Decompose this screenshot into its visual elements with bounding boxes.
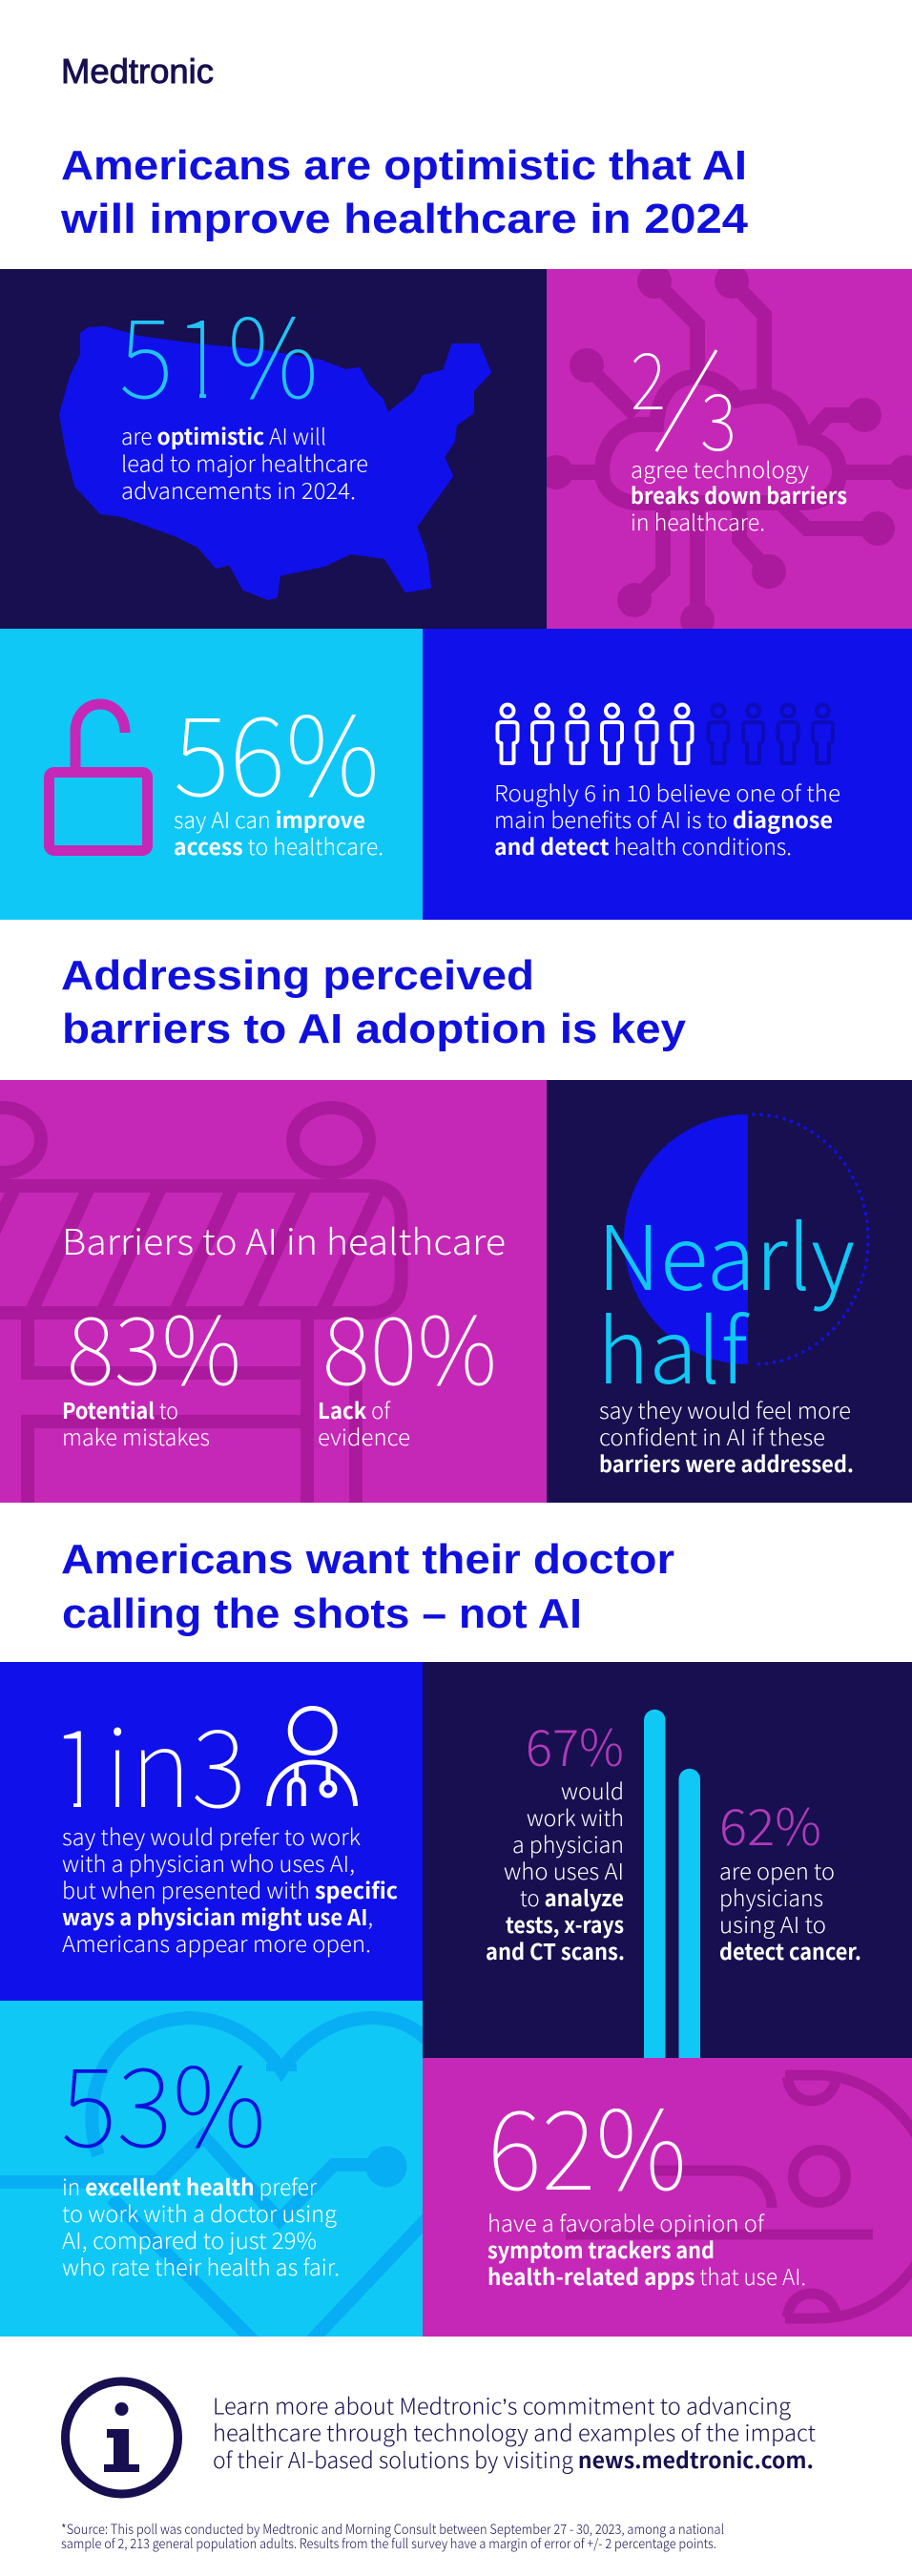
text: prefer physician: ways a physician might use AI, bbox=[62, 1900, 373, 1932]
stat: nearly half: half bbox=[597, 1280, 750, 1409]
text: improve access: access to healthcare. bbox=[174, 829, 383, 862]
text: learn more: healthcare through technology and examples of the impact bbox=[213, 2416, 816, 2448]
stat: 2/3 bbox=[631, 319, 736, 473]
title: will improve healthcare in 2024 bbox=[60, 196, 749, 242]
text: analyze tests: work with bbox=[527, 1800, 624, 1833]
panel: nearly half bbox=[547, 1080, 912, 1503]
text: improve access bbox=[174, 802, 383, 862]
heading: barriers: barriers to AI adoption is key bbox=[62, 1006, 687, 1052]
text: diagnose and detect: Roughly 6 in 10 believe one of the bbox=[494, 776, 840, 808]
text: potential: Potential to bbox=[62, 1393, 178, 1425]
text: prefer physician bbox=[62, 1819, 398, 1959]
text: analyze tests: who uses AI bbox=[504, 1854, 624, 1886]
text: diagnose and detect bbox=[494, 776, 840, 862]
text: symptom trackers: health-related apps that use AI. bbox=[487, 2259, 806, 2292]
text: diagnose and detect: and detect health conditions. bbox=[494, 829, 792, 862]
stat: 62% favorable: 62% bbox=[487, 2064, 687, 2222]
text: breaks down barriers: breaks down barriers bbox=[631, 478, 847, 510]
text: analyze tests: and CT scans. bbox=[486, 1934, 625, 1966]
text: detect cancer: are open to bbox=[719, 1854, 835, 1886]
stat: nearly half: Nearly bbox=[597, 1187, 855, 1316]
chart: two bars bbox=[644, 1710, 700, 2058]
panel: 6 in 10 bbox=[423, 629, 912, 920]
stat: 1in3: 1in3 bbox=[50, 1682, 246, 1839]
source note: sample of 2, 213 general population adults. Results from the full survey have a margin of error of +/- 2 percentage points. bbox=[61, 2534, 716, 2553]
text: analyze tests bbox=[486, 1774, 625, 1966]
text: learn more: Learn more about Medtronic ’s commitment to advancing bbox=[213, 2389, 791, 2421]
text: symptom trackers: symptom trackers and bbox=[487, 2233, 715, 2265]
stat: 62% open: 62% bbox=[719, 1788, 821, 1860]
text: optimistic: lead to major healthcare bbox=[121, 447, 368, 479]
panel: 67% and 62% bbox=[423, 1662, 912, 2058]
stat: 67%: 67% bbox=[526, 1709, 624, 1781]
text: optimistic: advancements in 2024. bbox=[121, 473, 356, 506]
text: learn more: of their AI-based solutions by visiting news.medtronic.com. bbox=[213, 2442, 814, 2475]
text: prefer physician: Americans appear more open. bbox=[62, 1926, 371, 1959]
text: breaks down barriers bbox=[631, 452, 847, 537]
text: improve access: say AI can improve bbox=[174, 802, 365, 835]
source note: *Source: This poll was conducted by Medtronic and Morning Consult between September 27 - 30, 2023, among a national bbox=[61, 2520, 724, 2539]
panel: 51% optimistic bbox=[0, 269, 547, 629]
source note bbox=[61, 2520, 724, 2553]
text: analyze tests: a physician bbox=[512, 1827, 624, 1859]
text: detect cancer: detect cancer. bbox=[719, 1934, 861, 1966]
icon: heart with pulse bbox=[0, 2018, 429, 2342]
text: more confident bbox=[599, 1393, 854, 1479]
icon: stethoscope bbox=[566, 2075, 912, 2318]
stat: 83%: 83% bbox=[67, 1277, 241, 1412]
text: lack of evidence: Lack of bbox=[318, 1393, 391, 1425]
text: potential: make mistakes bbox=[62, 1420, 210, 1452]
text: diagnose and detect: main benefits of AI is to diagnose bbox=[494, 802, 833, 835]
text: excellent health: in excellent health prefer bbox=[62, 2170, 318, 2202]
text: detect cancer: using AI to bbox=[719, 1907, 826, 1940]
Medtronic logo: Medtronic bbox=[61, 52, 214, 91]
text: excellent health: AI, compared to just 29% bbox=[62, 2223, 317, 2255]
panel: 1 in 3 bbox=[0, 1662, 423, 2001]
heading: barriers bbox=[61, 952, 687, 1052]
icon: cloud circuit bbox=[539, 264, 912, 637]
panel: 53% excellent health bbox=[0, 2001, 429, 2342]
text: analyze tests: tests, x-rays bbox=[506, 1907, 624, 1940]
heading: doctors: Americans want their doctor bbox=[61, 1536, 674, 1583]
panel: 2/3 technology bbox=[539, 264, 912, 637]
text: more confident: confident in AI if these bbox=[599, 1420, 825, 1452]
panel: 62% symptom trackers bbox=[423, 2058, 912, 2337]
text: learn more bbox=[213, 2389, 816, 2475]
text: prefer physician: with a physician who uses AI, bbox=[62, 1846, 355, 1879]
text: symptom trackers bbox=[487, 2206, 806, 2292]
text: optimistic: are optimistic AI will bbox=[121, 419, 326, 451]
text: excellent health: to work with a doctor using bbox=[62, 2196, 337, 2229]
heading: doctors: calling the shots – not AI bbox=[62, 1590, 582, 1637]
text: lack of evidence bbox=[318, 1393, 410, 1452]
stat: 53%: 53% bbox=[61, 2021, 266, 2179]
panel: 56% access bbox=[0, 629, 423, 920]
stat: 56%: 56% bbox=[174, 670, 380, 828]
text: lack of evidence: evidence bbox=[318, 1420, 410, 1452]
chart: half filled circle bbox=[624, 1114, 868, 1364]
text: more confident: barriers were addressed. bbox=[599, 1446, 854, 1479]
text: breaks down barriers: agree technology bbox=[631, 452, 809, 485]
title bbox=[60, 142, 749, 242]
text: excellent health: who rate their health as fair. bbox=[62, 2250, 340, 2282]
stat: 2/3: 3 bbox=[700, 360, 736, 473]
text: breaks down barriers: in healthcare. bbox=[631, 505, 765, 537]
stat: nearly half bbox=[597, 1187, 855, 1409]
text: excellent health bbox=[62, 2170, 340, 2282]
text: analyze tests: would bbox=[561, 1774, 624, 1806]
icon: road barrier bbox=[0, 1108, 401, 1517]
text: prefer physician: say they would prefer to work bbox=[62, 1819, 361, 1852]
text: prefer physician: but when presented with specific bbox=[62, 1873, 398, 1905]
stat: 51%: 51% bbox=[119, 272, 319, 430]
text: detect cancer bbox=[719, 1854, 861, 1966]
icon: information bbox=[65, 2381, 177, 2494]
heading: barriers: Addressing perceived bbox=[61, 952, 534, 999]
text: potential bbox=[62, 1393, 210, 1452]
icon: open padlock bbox=[50, 704, 147, 851]
panel: barriers to AI bbox=[0, 1080, 547, 1517]
icon: US map bbox=[61, 328, 489, 598]
stat: 2/3: 2 bbox=[631, 319, 666, 432]
icon: ten people, six highlighted bbox=[498, 704, 833, 763]
title: Americans are optimistic that AI bbox=[61, 142, 747, 189]
text: detect cancer: physicians bbox=[719, 1880, 823, 1913]
heading: doctors bbox=[61, 1536, 674, 1637]
icon: doctor bbox=[269, 1708, 356, 1806]
subheading: Barriers to AI in healthcare bbox=[62, 1214, 506, 1265]
text: more confident: say they would feel more bbox=[599, 1393, 851, 1425]
text: analyze tests: to analyze bbox=[520, 1880, 624, 1913]
stat: 80%: 80% bbox=[322, 1277, 497, 1412]
text: optimistic bbox=[121, 419, 368, 506]
text: symptom trackers: have a favorable opinion of bbox=[487, 2206, 765, 2238]
